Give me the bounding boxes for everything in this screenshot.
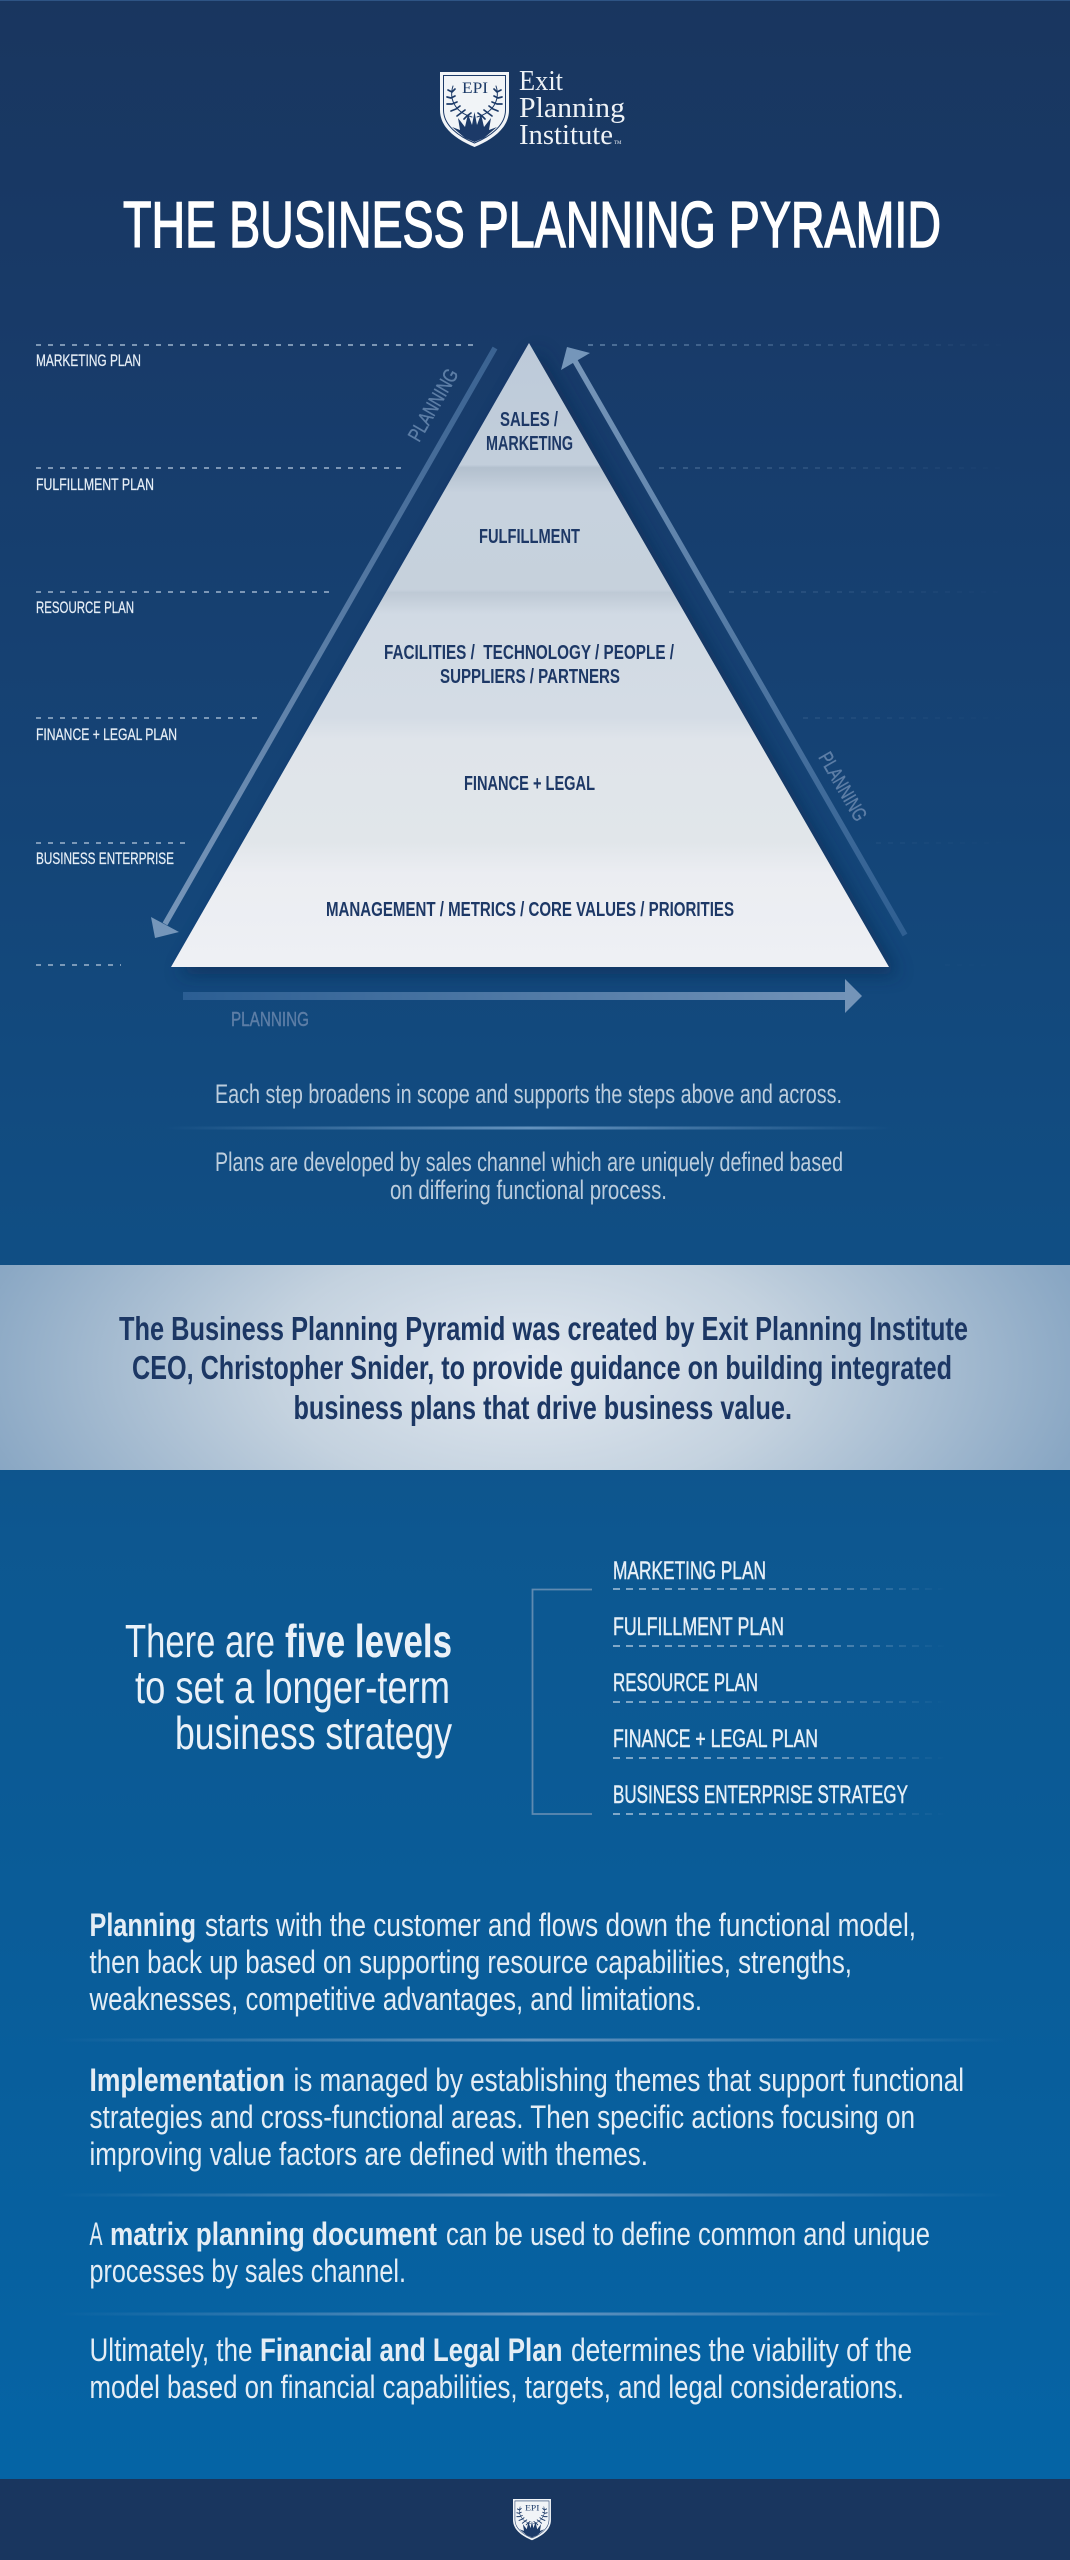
- text block: financial and legal plan: determines the viability of the: [571, 2332, 912, 2368]
- logo wordmark: Exit: [519, 65, 563, 97]
- planning label: left: PLANNING: [404, 365, 463, 446]
- logo wordmark: Planning: [519, 92, 625, 124]
- pyramid label: finance + legal: FINANCE + LEGAL: [464, 773, 595, 795]
- logo: Exit Planning Institute: [440, 65, 625, 151]
- footer: [0, 2479, 1070, 2560]
- text block: implementation: improving value factors are defined with themes.: [90, 2136, 648, 2172]
- note: plans by sales channel: [215, 1147, 843, 1205]
- note: each step: Each step broadens in scope and supports the steps above and across.: [215, 1079, 842, 1109]
- band: pyramid origin callout: business plans that drive business value.: [294, 1389, 792, 1426]
- list item: marketing plan: MARKETING PLAN: [613, 1557, 766, 1585]
- bracket: [532, 1590, 592, 1814]
- icon: footer EPI shield: EPI: [525, 2503, 539, 2513]
- text block: matrix planning document: matrix planning document: [110, 2216, 437, 2252]
- pyramid label: sales / marketing: [486, 409, 573, 455]
- logo wordmark: Institute: [519, 119, 613, 151]
- logo wordmark: [519, 65, 625, 151]
- text block: matrix planning document: [90, 2216, 930, 2289]
- level labels: [36, 351, 177, 868]
- planning label: right: PLANNING: [814, 748, 871, 825]
- text block: financial and legal plan: [90, 2332, 912, 2405]
- text block: matrix planning document: processes by sales channel.: [90, 2253, 406, 2289]
- list item: business enterprise strategy: BUSINESS ENTERPRISE STRATEGY: [613, 1781, 908, 1809]
- arrow: left planning down: [151, 348, 495, 938]
- planning label: bottom: PLANNING: [231, 1009, 309, 1031]
- icon: EPI shield: [440, 72, 509, 147]
- text block: planning: Planning: [90, 1907, 196, 1943]
- text block: planning: then back up based on supporting resource capabilities, strengths,: [90, 1944, 852, 1980]
- heading: five levels: five levels: [285, 1615, 452, 1667]
- list item: fulfillment plan: FULFILLMENT PLAN: [613, 1613, 784, 1641]
- right level dashed lines: [588, 345, 1010, 965]
- text block: financial and legal plan: Financial and Legal Plan: [260, 2332, 562, 2368]
- heading: five levels: business strategy: [175, 1707, 452, 1759]
- level labels: MARKETING PLAN: [36, 351, 141, 370]
- list: five plan levels: [613, 1557, 945, 1814]
- pyramid label: resources: SUPPLIERS / PARTNERS: [440, 666, 620, 688]
- text block: planning: [89, 1907, 916, 2017]
- icon: footer EPI shield: [513, 2499, 551, 2540]
- pyramid label: sales / marketing: SALES /: [500, 409, 558, 431]
- level labels: RESOURCE PLAN: [36, 598, 134, 617]
- text block: financial and legal plan: Ultimately, the: [90, 2332, 252, 2368]
- logo wordmark: TM: [614, 141, 622, 146]
- pyramid label: fulfillment: FULFILLMENT: [479, 526, 580, 548]
- pyramid label: resources: [384, 642, 674, 688]
- heading: five levels: There are: [125, 1615, 275, 1667]
- text block: financial and legal plan: model based on financial capabilities, targets, and legal considerations.: [90, 2369, 904, 2405]
- text block: planning: starts with the customer and flows down the functional model,: [205, 1907, 916, 1943]
- note: plans by sales channel: Plans are developed by sales channel which are uniquely defined based: [215, 1147, 843, 1177]
- arrow: right planning up: [561, 347, 905, 935]
- level labels: BUSINESS ENTERPRISE: [36, 849, 174, 868]
- list item: finance + legal plan: FINANCE + LEGAL PLAN: [613, 1725, 818, 1753]
- pyramid label: sales / marketing: MARKETING: [486, 433, 573, 455]
- level labels: FULFILLMENT PLAN: [36, 475, 154, 494]
- left level dashed lines: [36, 345, 478, 965]
- band: pyramid origin callout: [0, 1265, 1070, 1470]
- icon: EPI shield: EPI: [462, 80, 488, 97]
- text block: planning: weaknesses, competitive advantages, and limitations.: [89, 1981, 702, 2017]
- text block: matrix planning document: A: [90, 2216, 103, 2252]
- pyramid: [171, 343, 898, 974]
- text block: matrix planning document: can be used to define common and unique: [446, 2216, 930, 2252]
- heading: five levels: [125, 1615, 452, 1759]
- text block: implementation: [90, 2062, 964, 2172]
- pyramid label: resources: FACILITIES / TECHNOLOGY / PEOPLE /: [384, 642, 674, 664]
- level labels: FINANCE + LEGAL PLAN: [36, 725, 177, 744]
- arrow: bottom planning: [183, 979, 862, 1013]
- pyramid label: management: MANAGEMENT / METRICS / CORE VALUES / PRIORITIES: [326, 899, 734, 921]
- list item: resource plan: RESOURCE PLAN: [613, 1669, 758, 1697]
- heading: five levels: to set a longer-term: [135, 1661, 450, 1713]
- text block: implementation: Implementation: [90, 2062, 285, 2098]
- note: plans by sales channel: on differing functional process.: [390, 1175, 667, 1205]
